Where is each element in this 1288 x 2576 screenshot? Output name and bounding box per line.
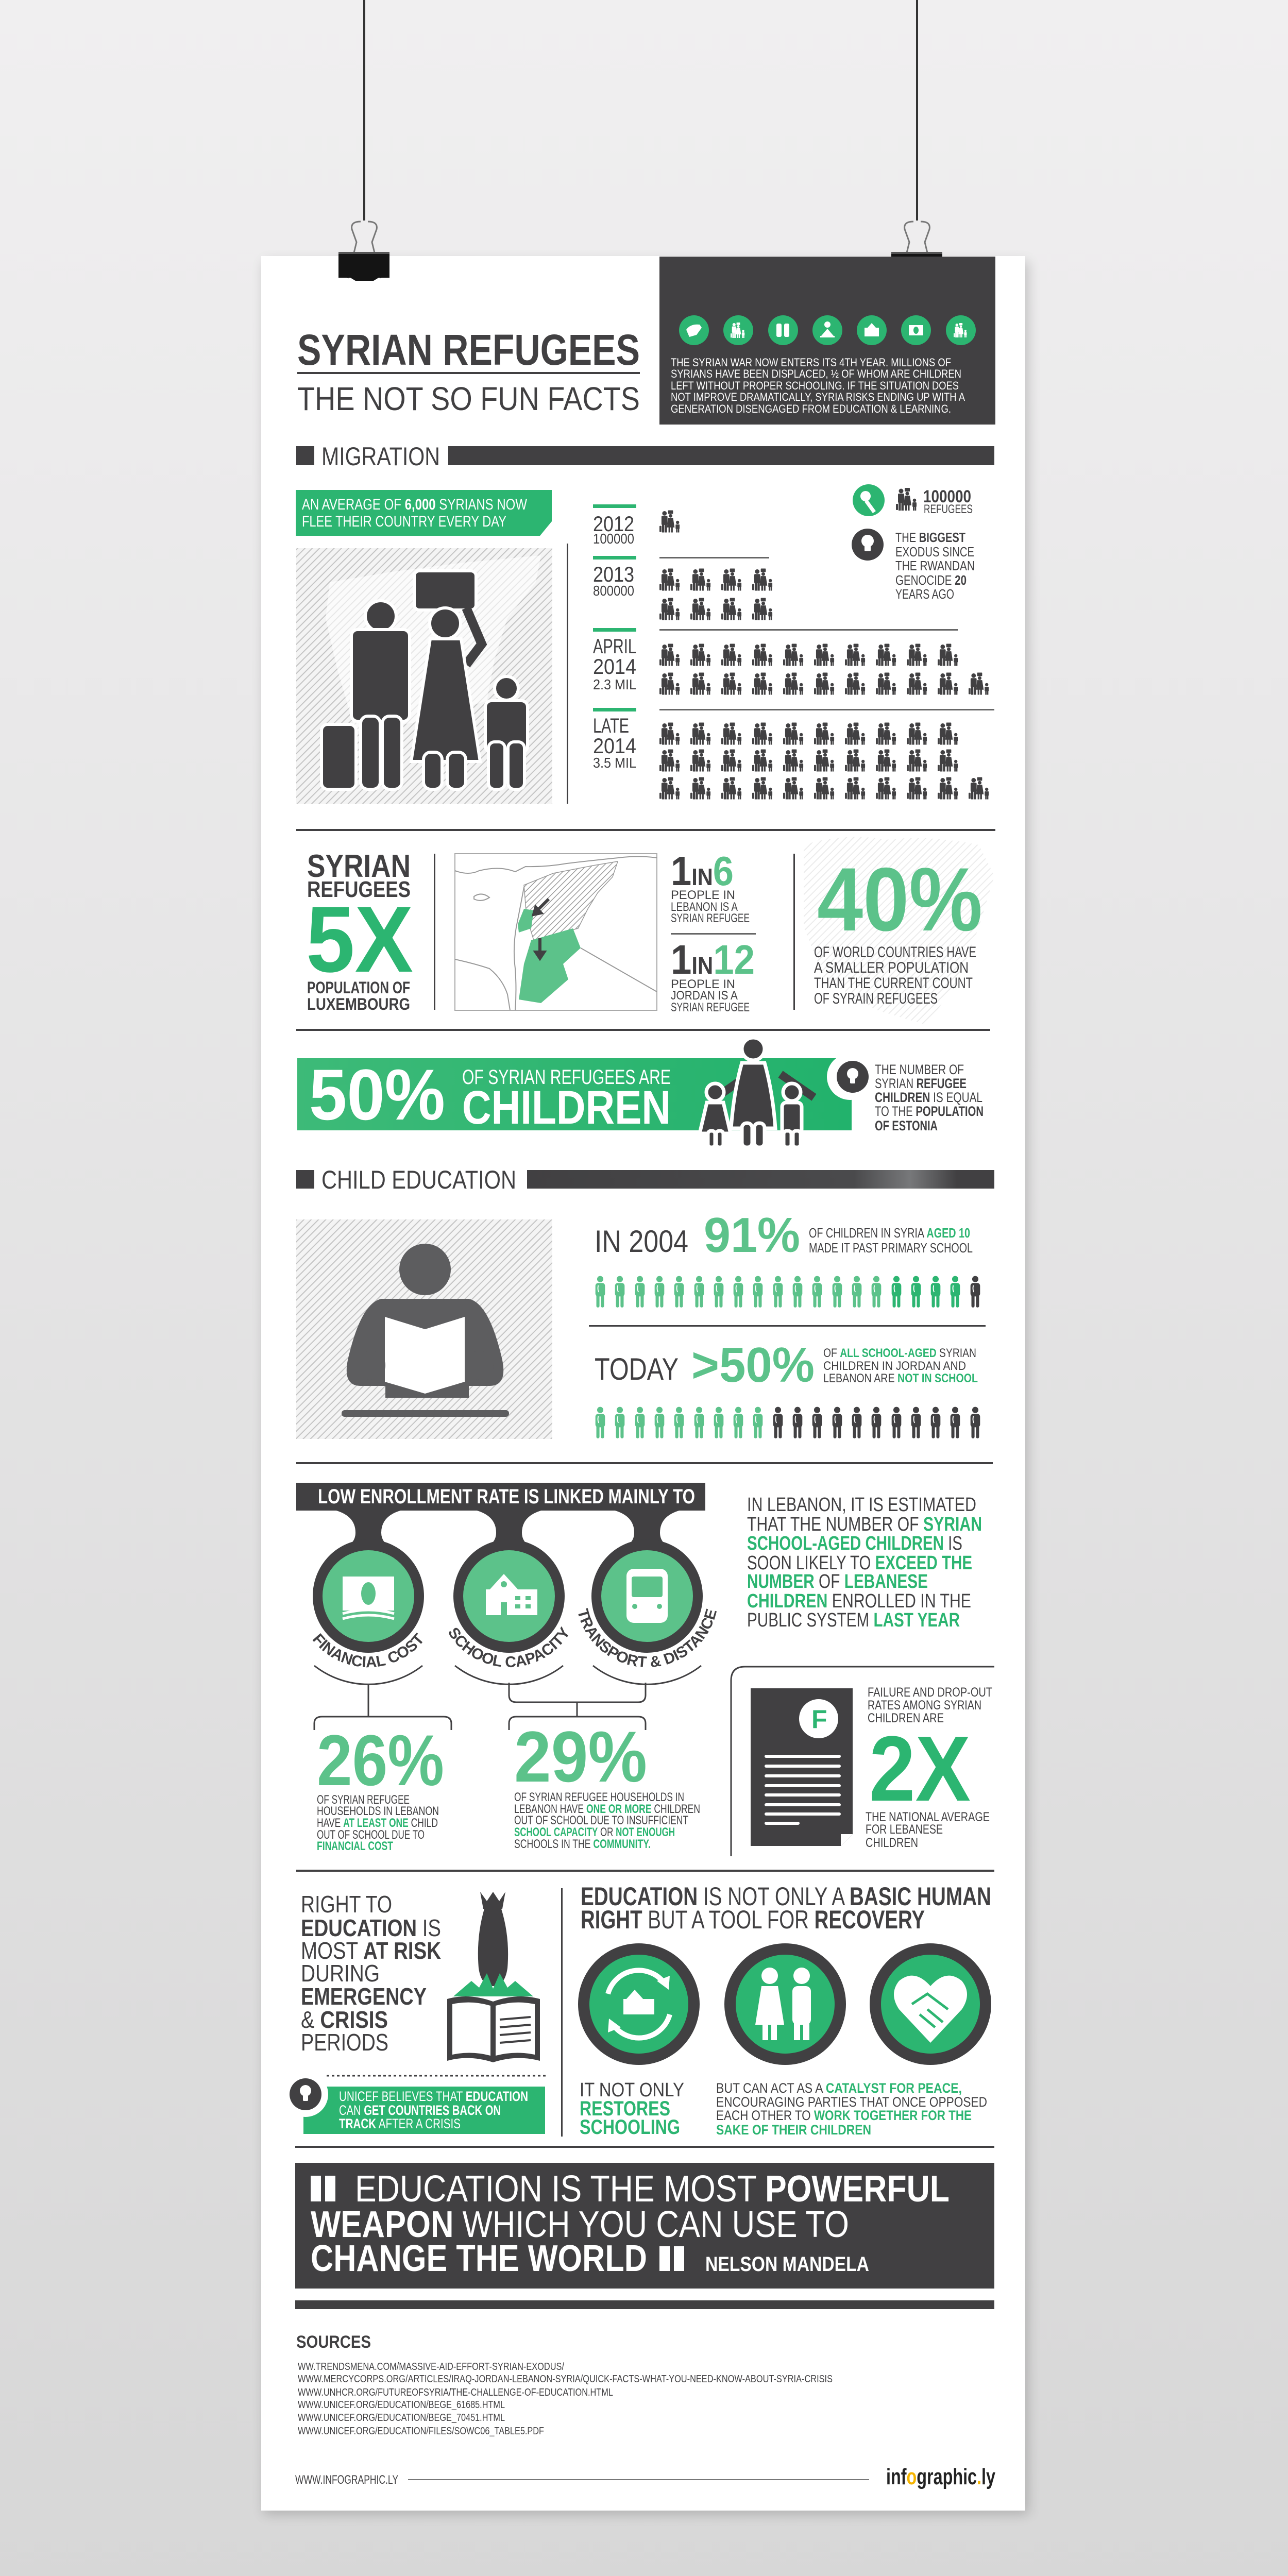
stat: 91% in 2004: MADE IT PAST PRIMARY SCHOOL bbox=[809, 1240, 973, 1256]
icon: two people bbox=[724, 1943, 846, 2065]
timeline labels: APRIL bbox=[593, 635, 636, 658]
stat: 40%: OF WORLD COUNTRIES HAVE bbox=[814, 944, 976, 961]
timeline labels: 2013 bbox=[593, 562, 634, 586]
timeline labels: 2.3 MIL bbox=[593, 676, 636, 692]
text: restores schooling: IT NOT ONLY bbox=[580, 2079, 684, 2101]
text block: Lebanon estimate: SOON LIKELY TO EXCEED THE bbox=[747, 1552, 972, 1574]
stat: 29%: 29% bbox=[514, 1716, 647, 1797]
stat: 40% bbox=[804, 837, 994, 1025]
timeline labels: 3.5 MIL bbox=[593, 755, 636, 771]
panel: 2X failure rate: RATES AMONG SYRIAN bbox=[868, 1698, 981, 1713]
callout: 6,000 per day: AN AVERAGE OF 6,000 SYRIANS NOW bbox=[302, 496, 528, 513]
legend: key: 100000 bbox=[923, 487, 971, 506]
heading: education not only a right: RIGHT BUT A TOOL FOR RECOVERY bbox=[581, 1905, 925, 1934]
stat: 1 in 6 / 1 in 12: PEOPLE IN bbox=[671, 888, 735, 902]
quote: Nelson Mandela bbox=[295, 2163, 994, 2289]
panel: 2X failure rate: CHILDREN bbox=[866, 1836, 918, 1850]
text block: Lebanon estimate bbox=[747, 1494, 982, 1631]
logo: infographic.ly bbox=[886, 2464, 995, 2489]
title: SYRIAN REFUGEES bbox=[297, 326, 640, 374]
stat: 29%: SCHOOLS IN THE COMMUNITY. bbox=[514, 1837, 651, 1851]
icon: bus bbox=[591, 1539, 703, 1653]
text: catalyst for peace: BUT CAN ACT AS A CATALYST FOR PEACE, bbox=[716, 2080, 962, 2096]
stat: 1 in 6 / 1 in 12: PEOPLE IN bbox=[671, 977, 735, 991]
quote: Nelson Mandela: NELSON MANDELA bbox=[705, 2253, 869, 2276]
timeline labels: 100000 bbox=[593, 531, 634, 547]
text block: right to education at risk bbox=[301, 1891, 441, 2056]
labels on arcs bbox=[312, 1608, 717, 1667]
stat: 5X Luxembourg: REFUGEES bbox=[307, 877, 411, 902]
stat: 29%: LEBANON HAVE ONE OR MORE CHILDREN bbox=[514, 1802, 700, 1816]
icon: money bbox=[313, 1539, 424, 1653]
text: catalyst for peace bbox=[716, 2080, 987, 2138]
banner: 50% children bbox=[297, 1054, 852, 1135]
panel: 2X failure rate: FAILURE AND DROP-OUT bbox=[868, 1685, 992, 1700]
timeline labels: 800000 bbox=[593, 583, 634, 599]
stat: 26%: OF SYRIAN REFUGEE bbox=[317, 1793, 410, 1807]
text block: right to education at risk: RIGHT TO bbox=[301, 1891, 392, 1918]
stat: 29%: OUT OF SCHOOL DUE TO INSUFFICIENT bbox=[514, 1814, 688, 1827]
icon: bomb over book bbox=[447, 1892, 540, 2062]
stat: 5X Luxembourg: SYRIAN bbox=[307, 849, 411, 884]
text block: right to education at risk: PERIODS bbox=[301, 2029, 388, 2056]
callout: Estonia bbox=[827, 1054, 984, 1133]
poster sheet bbox=[261, 256, 1025, 2511]
intro text bbox=[671, 356, 965, 415]
intro text: SYRIANS HAVE BEEN DISPLACED, ½ OF WHOM ARE CHILDREN bbox=[671, 367, 961, 380]
callout: UNICEF: TRACK AFTER A CRISIS bbox=[339, 2116, 461, 2131]
illustration: refugee family bbox=[296, 548, 552, 804]
callout: UNICEF: CAN GET COUNTRIES BACK ON bbox=[339, 2103, 501, 2118]
stat: 26%: FINANCIAL COST bbox=[317, 1839, 393, 1853]
text block: Lebanon estimate: PUBLIC SYSTEM LAST YEAR bbox=[747, 1609, 960, 1631]
stat: >50% today: >50% bbox=[691, 1337, 815, 1393]
text block: Lebanon estimate: SCHOOL-AGED CHILDREN IS bbox=[747, 1533, 962, 1554]
text: restores schooling bbox=[580, 2079, 684, 2139]
map: Syria, Lebanon, Jordan bbox=[455, 854, 657, 1010]
callout: biggest exodus: YEARS AGO bbox=[895, 586, 954, 602]
callout: biggest exodus: EXODUS SINCE bbox=[895, 544, 974, 560]
sources: WWW.UNICEF.ORG/EDUCATION/FILES/SOWC06_TABLE5.PDF bbox=[298, 2426, 544, 2437]
text block: right to education at risk: EMERGENCY bbox=[301, 1983, 427, 2010]
icon: school bbox=[453, 1539, 565, 1653]
callout: 6,000 per day: FLEE THEIR COUNTRY EVERY DAY bbox=[302, 513, 506, 530]
hanging strings bbox=[363, 0, 918, 221]
stat: >50% today bbox=[595, 1337, 978, 1393]
banner: 50% children: OF SYRIAN REFUGEES ARE bbox=[462, 1066, 671, 1089]
panel: low enrollment causes bbox=[296, 1483, 717, 1730]
stat: 91% in 2004 bbox=[595, 1208, 973, 1263]
binder clip right bbox=[891, 222, 942, 281]
callout: Estonia: SYRIAN REFUGEE bbox=[875, 1076, 967, 1091]
section heading: child education: CHILD EDUCATION bbox=[321, 1165, 516, 1194]
callout: Estonia: THE NUMBER OF bbox=[875, 1062, 964, 1077]
panel: 2X failure rate: THE NATIONAL AVERAGE bbox=[866, 1810, 990, 1824]
illustration: child reading bbox=[296, 1219, 552, 1439]
labels on arcs: SCHOOL CAPACITY bbox=[449, 1626, 568, 1667]
stat: 1 in 6 / 1 in 12: SYRIAN REFUGEE bbox=[671, 1001, 750, 1014]
stat: 29%: SCHOOL CAPACITY OR NOT ENOUGH bbox=[514, 1825, 675, 1839]
divider vertical bbox=[567, 544, 568, 804]
illustration: mother and children bbox=[700, 1038, 814, 1147]
heading banner: LOW ENROLLMENT RATE IS LINKED MAINLY TO bbox=[318, 1485, 695, 1508]
timeline labels: 2014 bbox=[593, 654, 636, 679]
stat: 5X Luxembourg: LUXEMBOURG bbox=[307, 995, 410, 1013]
icon: restores schooling bbox=[578, 1943, 700, 2065]
intro text: GENERATION DISENGAGED FROM EDUCATION & LEARNING. bbox=[671, 402, 951, 415]
icon: heart handshake bbox=[870, 1943, 991, 2065]
labels on arcs: FINANCIAL COST bbox=[312, 1633, 422, 1667]
text block: Lebanon estimate: THAT THE NUMBER OF SYRIAN bbox=[747, 1514, 982, 1535]
callout: UNICEF: UNICEF BELIEVES THAT EDUCATION bbox=[339, 2089, 528, 2104]
sources: WWW.UNHCR.ORG/FUTUREOFSYRIA/THE-CHALLENGE-OF-EDUCATION.HTML bbox=[298, 2387, 613, 2398]
stat: 40%: A SMALLER POPULATION bbox=[814, 959, 969, 976]
callout: UNICEF bbox=[283, 2072, 545, 2134]
footer bbox=[295, 2464, 995, 2489]
stat: >50% today: TODAY bbox=[595, 1352, 679, 1386]
legend: key: REFUGEES bbox=[924, 502, 973, 516]
stat: 91% in 2004: 91% bbox=[704, 1208, 800, 1263]
sources: WW.TRENDSMENA.COM/MASSIVE-AID-EFFORT-SYRIAN-EXODUS/ bbox=[298, 2361, 564, 2372]
icon: failed report bbox=[751, 1688, 853, 1846]
sources: SOURCES bbox=[296, 2332, 371, 2352]
stat: 1 in 6 / 1 in 12: 1IN12 bbox=[671, 937, 755, 982]
sources: WWW.MERCYCORPS.ORG/ARTICLES/IRAQ-JORDAN-LEBANON-SYRIA/QUICK-FACTS-WHAT-YOU-NEED-KNOW-ABOUT-SYRIA-CRISIS bbox=[298, 2374, 833, 2385]
stat: 1 in 6 / 1 in 12: SYRIAN REFUGEE bbox=[671, 911, 750, 925]
text: catalyst for peace: SAKE OF THEIR CHILDREN bbox=[716, 2122, 871, 2138]
callout: Estonia: OF ESTONIA bbox=[875, 1118, 938, 1133]
icon: failed report: F bbox=[811, 1705, 827, 1734]
chart: refugee icon rows bbox=[659, 510, 994, 800]
heading: education not only a right bbox=[581, 1882, 991, 1934]
stat: 5X Luxembourg: 5X bbox=[306, 887, 413, 992]
stat: 40%: THAN THE CURRENT COUNT bbox=[814, 975, 973, 992]
footer: WWW.INFOGRAPHIC.LY bbox=[295, 2473, 398, 2487]
stat: 26%: HAVE AT LEAST ONE CHILD bbox=[317, 1816, 438, 1830]
callout: Estonia: TO THE POPULATION bbox=[875, 1104, 984, 1119]
callout: 6,000 per day bbox=[296, 490, 552, 536]
timeline labels: 2014 bbox=[593, 734, 636, 758]
text block: right to education at risk: EDUCATION IS bbox=[301, 1914, 441, 1941]
panel: intro dark box bbox=[659, 257, 995, 425]
timeline labels bbox=[593, 504, 636, 771]
section heading: migration bbox=[296, 442, 994, 471]
callout: Estonia: CHILDREN IS EQUAL bbox=[875, 1090, 982, 1105]
binder clip left bbox=[338, 222, 389, 281]
text block: right to education at risk: DURING bbox=[301, 1960, 380, 1987]
callout: biggest exodus bbox=[852, 529, 975, 602]
panel: 2X failure rate bbox=[731, 1667, 994, 1856]
intro text: LEFT WITHOUT PROPER SCHOOLING. IF THE SITUATION DOES bbox=[671, 379, 959, 392]
sources: WWW.UNICEF.ORG/EDUCATION/BEGE_61685.HTML bbox=[298, 2399, 505, 2411]
stat: 26%: HOUSEHOLDS IN LEBANON bbox=[317, 1804, 439, 1818]
stat: 1 in 6 / 1 in 12 bbox=[671, 848, 756, 1014]
legend: key bbox=[853, 484, 973, 516]
stat: 1 in 6 / 1 in 12: JORDAN IS A bbox=[671, 989, 738, 1003]
timeline labels: 2012 bbox=[593, 512, 634, 536]
stat: 1 in 6 / 1 in 12: 1IN6 bbox=[671, 848, 734, 894]
stat: 26%: 26% bbox=[317, 1720, 444, 1801]
section heading: migration: MIGRATION bbox=[321, 442, 440, 471]
banner: 50% children: CHILDREN bbox=[462, 1081, 671, 1134]
stat: 5X Luxembourg: POPULATION OF bbox=[307, 978, 410, 997]
labels on arcs: TRANSPORT & DISTANCE bbox=[578, 1608, 717, 1667]
text: catalyst for peace: ENCOURAGING PARTIES THAT ONCE OPPOSED bbox=[716, 2094, 987, 2110]
panel: 2X failure rate: 2X bbox=[869, 1717, 971, 1821]
callout: biggest exodus: GENOCIDE 20 bbox=[895, 572, 967, 588]
stat: 40%: OF SYRAIN REFUGEES bbox=[814, 990, 938, 1007]
sources: WWW.UNICEF.ORG/EDUCATION/BEGE_70451.HTML bbox=[298, 2412, 505, 2424]
panel: 2X failure rate: CHILDREN ARE bbox=[868, 1711, 944, 1725]
chart: children icons 2004 bbox=[596, 1276, 980, 1308]
text: restores schooling: SCHOOLING bbox=[580, 2116, 680, 2139]
quote: Nelson Mandela: WEAPON WHICH YOU CAN USE TO bbox=[311, 2204, 849, 2245]
text block: Lebanon estimate: IN LEBANON, IT IS ESTIMATED bbox=[747, 1494, 976, 1516]
stat: 26%: OUT OF SCHOOL DUE TO bbox=[317, 1828, 425, 1842]
stat: 91% in 2004: IN 2004 bbox=[595, 1224, 688, 1259]
stat: 91% in 2004: OF CHILDREN IN SYRIA AGED 10 bbox=[809, 1225, 970, 1241]
text: catalyst for peace: EACH OTHER TO WORK TOGETHER FOR THE bbox=[716, 2108, 972, 2123]
callout: biggest exodus: THE RWANDAN bbox=[895, 558, 975, 573]
banner: 50% children: 50% bbox=[309, 1054, 445, 1135]
panel: 2X failure rate: FOR LEBANESE bbox=[866, 1822, 943, 1837]
stat: >50% today: CHILDREN IN JORDAN AND bbox=[823, 1359, 966, 1373]
title: THE NOT SO FUN FACTS bbox=[297, 380, 640, 417]
section heading: child education bbox=[296, 1165, 994, 1194]
text: restores schooling: RESTORES bbox=[580, 2097, 670, 2120]
stat: 29% bbox=[514, 1716, 700, 1851]
quote: Nelson Mandela: CHANGE THE WORLD bbox=[311, 2238, 647, 2279]
timeline labels: LATE bbox=[593, 715, 629, 737]
stat: >50% today: LEBANON ARE NOT IN SCHOOL bbox=[823, 1371, 978, 1385]
sources bbox=[296, 2332, 833, 2437]
callout: biggest exodus: THE BIGGEST bbox=[895, 530, 965, 545]
text block: Lebanon estimate: CHILDREN ENROLLED IN THE bbox=[747, 1590, 971, 1612]
text block: right to education at risk: & CRISIS bbox=[301, 2006, 388, 2033]
stat: 26% bbox=[317, 1720, 444, 1853]
heading: education not only a right: EDUCATION IS NOT ONLY A BASIC HUMAN bbox=[581, 1882, 991, 1911]
stat: 5X Luxembourg bbox=[306, 849, 413, 1013]
chart: children icons today bbox=[596, 1407, 980, 1438]
stat: >50% today: OF ALL SCHOOL-AGED SYRIAN bbox=[823, 1346, 976, 1360]
poster shadow bbox=[264, 262, 1028, 2514]
title bbox=[297, 326, 640, 417]
stat: 1 in 6 / 1 in 12: LEBANON IS A bbox=[671, 900, 738, 914]
icon row bbox=[679, 315, 976, 345]
stat: 40%: 40% bbox=[817, 850, 982, 950]
text block: right to education at risk: MOST AT RISK bbox=[301, 1937, 441, 1964]
quote: Nelson Mandela: EDUCATION IS THE MOST POWERFUL bbox=[355, 2168, 950, 2210]
stat: 29%: OF SYRIAN REFUGEE HOUSEHOLDS IN bbox=[514, 1790, 684, 1804]
heading banner bbox=[296, 1483, 705, 1511]
intro text: NOT IMPROVE DRAMATICALLY, SYRIA RISKS ENDING UP WITH A bbox=[671, 391, 965, 403]
intro text: THE SYRIAN WAR NOW ENTERS ITS 4TH YEAR. MILLIONS OF bbox=[671, 356, 951, 369]
text block: Lebanon estimate: NUMBER OF LEBANESE bbox=[747, 1571, 928, 1592]
